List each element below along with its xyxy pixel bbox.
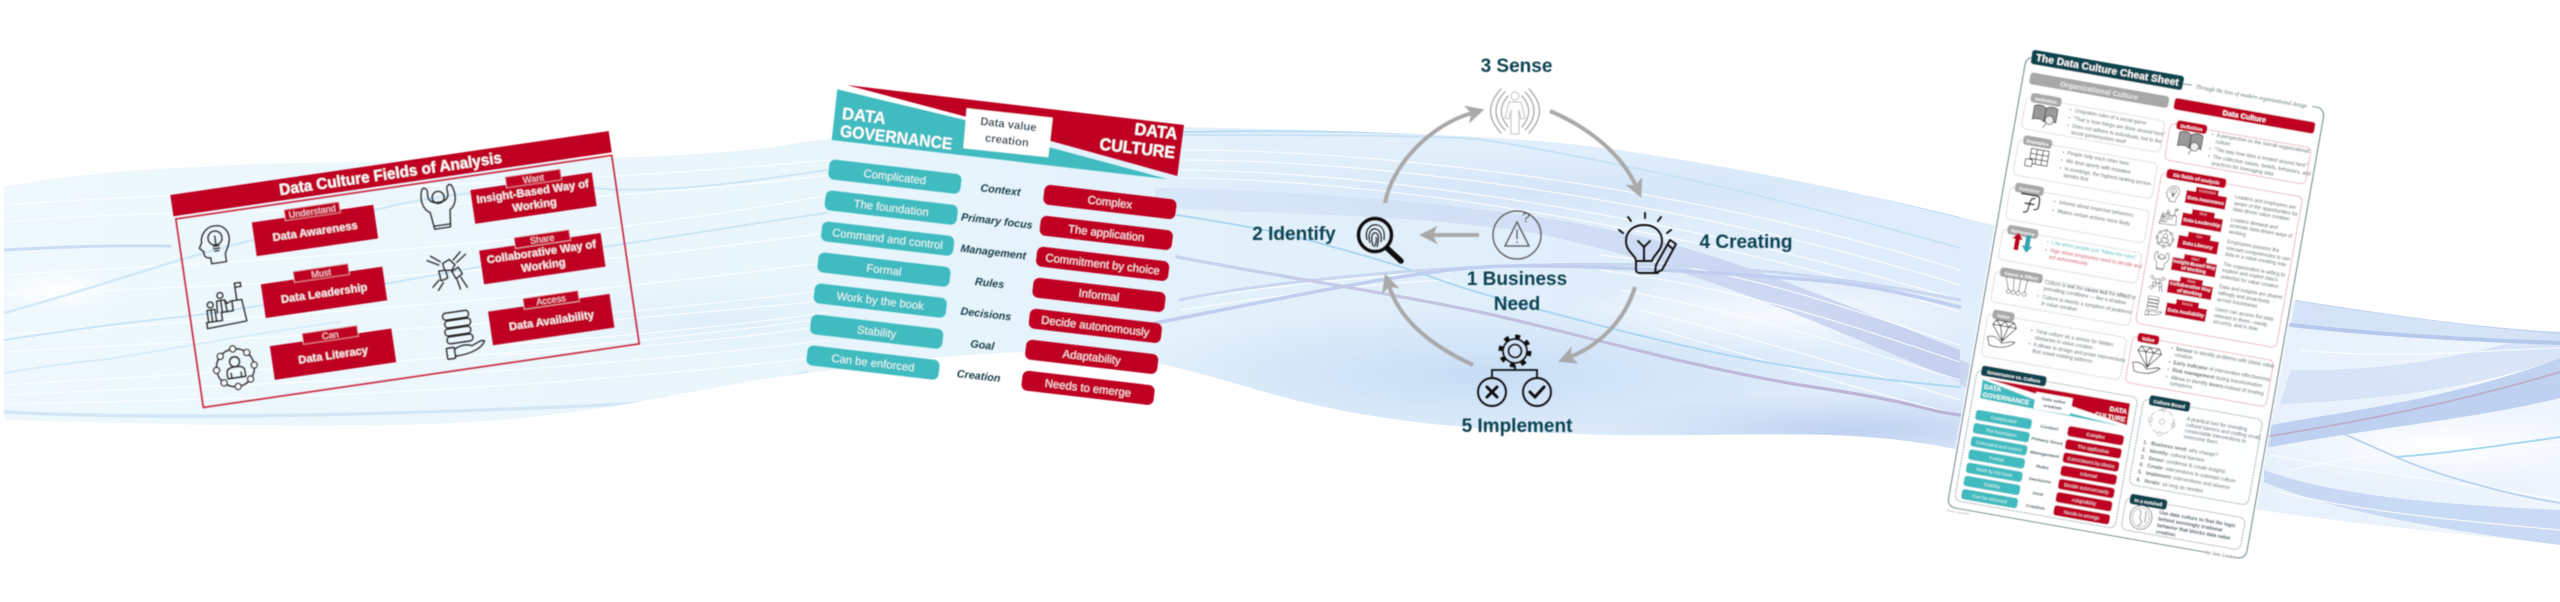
field row: data literacy: data in a value-creating way <box>2224 252 2287 269</box>
box: culture board: Implement: <box>2145 471 2173 481</box>
box: culture board: 5. <box>2137 470 2143 476</box>
field row: data awareness: Data Awareness <box>2187 195 2225 207</box>
version note: Version: July 2024 <box>1946 508 1970 516</box>
field: data availability: Access <box>536 293 567 307</box>
box: culture board: connectable interventions to <box>2184 428 2247 445</box>
field row: data awareness: Understand <box>2198 188 2216 195</box>
row: creation: Needs to emerge <box>1044 378 1132 400</box>
box: culture board: 3. <box>2140 455 2146 461</box>
header banner: GOVERNANCE <box>839 122 953 154</box>
box: culture board: interventions and observe <box>2173 476 2230 492</box>
box: org examples: People help each other here <box>2067 151 2130 168</box>
icon: fingerprint magnifier <box>1358 218 1401 261</box>
box: org function: Informs about expected behaviors <box>2059 200 2134 219</box>
row: decisions: Decide autonomously <box>1041 315 1150 339</box>
box: culture board: Iterate: <box>2144 478 2162 487</box>
box: culture value: Value <box>2141 336 2155 344</box>
row: primary focus: The foundation <box>853 198 929 219</box>
box: org examples: • <box>2060 158 2063 164</box>
box: culture definition: A perspective on the overall organizational <box>2216 133 2310 155</box>
field: collaborative way of working: Collaborative Way of <box>486 239 597 267</box>
heading: 2 identify: 2 Identify <box>1252 224 1336 245</box>
comparison rows <box>806 159 1177 406</box>
mini row: primary focus: The foundation <box>1985 428 2017 438</box>
icon: raised arms <box>420 184 459 230</box>
header banner: DATA <box>841 104 887 128</box>
box: org function: • <box>2053 199 2056 205</box>
box: org definition: • <box>2067 123 2070 129</box>
row: creation: Creation <box>956 368 1001 385</box>
field row: collaborative way of working: Collaborative Way <box>2169 281 2212 294</box>
box: culture definition: practices for leveraging data <box>2211 161 2274 178</box>
icon: warning in circle <box>1493 209 1541 259</box>
mini header banner: creation <box>2043 403 2062 412</box>
field row: data literacy: Can <box>2196 234 2203 239</box>
box: culture definition: • <box>2209 146 2212 153</box>
field: collaborative way of working: Share <box>529 233 555 246</box>
coloured ribbons <box>4 131 2560 503</box>
row: management: Commitment by choice <box>1045 252 1160 278</box>
box: org examples: • <box>2059 166 2062 172</box>
icon: data stack on hand <box>441 308 486 359</box>
box: culture value: • <box>2168 359 2171 366</box>
mini row: decisions: Work by the book <box>1976 467 2013 478</box>
icon: person in network ring <box>210 343 260 393</box>
field row: data availability: relevant to them—easily, <box>2214 313 2268 328</box>
box: org definition: Definition <box>2035 96 2057 106</box>
panel: data culture fields of analysis <box>170 131 640 408</box>
heading: 1 business need: Need <box>1494 294 1540 315</box>
mini row: goal: Stability <box>1983 482 2001 490</box>
box: org relevance: act autonomously <box>2048 255 2089 267</box>
field: insight-based way of working: Working <box>512 196 558 215</box>
box: culture value: of intervention effectiveness <box>2208 367 2270 383</box>
row: rules: Informal <box>1078 288 1120 304</box>
arrow: creating to implement <box>1570 287 1635 357</box>
field row: collaborative way of working <box>2147 271 2283 314</box>
box: org function <box>2005 181 2150 243</box>
mini row: decisions: Decisions <box>2028 476 2052 486</box>
row: goal: Adaptability <box>1062 349 1122 367</box>
field row: collaborative way of working: across boundaries <box>2216 297 2258 310</box>
mini row: rules: Rules <box>2035 464 2050 472</box>
outline frame <box>176 155 639 407</box>
box: culture board: Business need: <box>2151 441 2188 453</box>
box: culture board: Sense: <box>2148 456 2165 465</box>
box: culture board: cultural barriers <box>2170 452 2205 464</box>
mini row: management: Management <box>2030 449 2060 460</box>
icon: gear with decision tree <box>1478 336 1551 406</box>
box: org examples: Examples <box>2026 138 2049 148</box>
box: culture board: Create: <box>2147 463 2165 472</box>
field row: data leadership <box>2159 204 2294 247</box>
field row: data leadership: Must <box>2199 212 2207 217</box>
row: decisions: Decisions <box>960 306 1012 323</box>
box: culture board: 6. <box>2136 477 2142 484</box>
field row: insight-based way of working: Want <box>2191 257 2199 262</box>
box: culture board: Identify: <box>2149 448 2170 458</box>
box: org value: Value <box>1997 313 2010 321</box>
row: context: Complicated <box>863 168 927 187</box>
box: culture board: condense & create insights <box>2165 459 2226 475</box>
box: culture value: during transformation <box>2215 375 2263 389</box>
row: goal: Goal <box>970 338 996 353</box>
field row: data availability: Data Availability <box>2167 307 2205 319</box>
box: in a nutshell: Use data culture to find the logic <box>2159 510 2236 529</box>
subtitle signature: Through the lens of modern organizational design <box>2195 83 2308 110</box>
box: org function: Function <box>2019 186 2040 195</box>
field row: data literacy: Data Literacy <box>2182 240 2213 251</box>
field: data leadership: Data Leadership <box>280 282 368 306</box>
box: org definition: • <box>2068 115 2071 122</box>
box: in a nutshell <box>2121 493 2246 550</box>
mini header banner: DATA <box>2109 406 2128 416</box>
box: governance vs culture: Governance vs. Culture <box>1987 369 2041 385</box>
icon: mini cycle <box>2146 405 2178 438</box>
field row: collaborative way of working: willingly and proactively <box>2218 290 2270 306</box>
mini header banner: DATA <box>1983 384 2002 394</box>
heading: 5 implement: 5 Implement <box>1462 416 1573 437</box>
box: culture value: levers instead of treating <box>2208 382 2264 397</box>
field row: data leadership: Leaders demand and <box>2230 217 2278 231</box>
data culture heading <box>2173 98 2316 134</box>
box: org examples: In meetings, the highest-ranking person <box>2064 166 2152 188</box>
box: culture value: Early indicator <box>2173 360 2208 372</box>
panel: culture cycle <box>1252 56 1792 437</box>
row: primary focus: The application <box>1067 224 1145 244</box>
wave background <box>0 100 2560 560</box>
box: culture value: • <box>2170 346 2173 352</box>
box: culture board: cultural barriers and crafting small, <box>2185 422 2261 442</box>
row: management: Command and control <box>832 227 943 252</box>
row: decisions: Work by the book <box>836 291 925 313</box>
box: culture definition: • <box>2211 132 2214 138</box>
field row: data awareness <box>2165 182 2300 224</box>
box: culture board: overcome them <box>2183 434 2218 446</box>
field: data literacy: Can <box>321 329 339 341</box>
row: goal: Stability <box>856 324 897 341</box>
row: creation <box>806 345 1155 406</box>
field row: insight-based way of working <box>2152 249 2286 291</box>
field: data availability: Data Availability <box>508 309 595 333</box>
heading: 1 business need: 1 Business <box>1467 269 1567 290</box>
mini row: rules: Formal <box>1989 455 2004 463</box>
box: org definition: "That is how things are done around here" <box>2073 116 2166 138</box>
field row: insight-based way of working: Insight-Based Way <box>2173 258 2216 272</box>
icon: climbers with flag <box>202 282 247 329</box>
mini header banner: Data value <box>2041 396 2066 406</box>
mini row: rules <box>1968 449 2118 485</box>
field row: insight-based way of working: of Working <box>2181 265 2206 276</box>
box: governance vs culture <box>1954 364 2139 529</box>
title: The Data Culture Cheat Sheet <box>2035 53 2180 89</box>
field row: collaborative way of working: Data and insights are shared <box>2219 284 2283 301</box>
box: culture board: A practical tool for revealing <box>2186 416 2248 433</box>
box: culture definition: "The way how data is treated around here" <box>2214 147 2308 169</box>
row: rules: Formal <box>866 263 902 279</box>
box: org cause and effect: in value creation <box>2041 301 2078 313</box>
mini header banner: CULTURE <box>2094 411 2126 424</box>
field: insight-based way of working: Insight-Based Way of <box>476 178 590 206</box>
row: context <box>828 159 1177 220</box>
box: org relevance: • <box>2045 247 2048 254</box>
box: culture board <box>2129 394 2265 506</box>
mini row: management <box>1970 436 2120 472</box>
box: org value: • <box>2028 341 2031 348</box>
box: culture board: 4. <box>2139 462 2144 469</box>
box: culture value: Sensor <box>2175 347 2193 355</box>
field: data awareness <box>251 197 378 256</box>
icon: lightbulb and pen <box>1619 213 1676 273</box>
mini header banner: GOVERNANCE <box>1982 392 2030 407</box>
icon: warning in circle: ? <box>1522 209 1530 225</box>
row: management: Management <box>960 243 1027 262</box>
box: in a nutshell: behind seemingly irrational <box>2158 516 2223 534</box>
field row: collaborative way of working: of Working <box>2177 288 2202 298</box>
icon: head with bulb <box>196 224 233 265</box>
heading: 4 creating: 4 Creating <box>1700 232 1792 253</box>
icon: sensing person <box>1490 89 1540 134</box>
box: culture value <box>2125 331 2276 407</box>
field row: data availability <box>2145 294 2274 337</box>
field row: data awareness: aware of the opportunities for <box>2233 201 2298 218</box>
organizational culture heading <box>2029 72 2170 108</box>
mini row: goal: Adaptability <box>2072 497 2097 507</box>
box: org relevance: Relevance <box>2011 228 2035 238</box>
box: org relevance <box>1998 224 2145 284</box>
box: org function: Makes certain actions more likely <box>2057 209 2131 228</box>
header bar: Data Culture Fields of Analysis <box>278 150 503 199</box>
box: org relevance: • <box>2046 239 2049 246</box>
box: org definition: Does not adhere to individuals, but to the <box>2071 124 2162 145</box>
panel: data governance vs data culture <box>806 85 1184 406</box>
field row: data literacy: Employees possess the <box>2227 239 2280 254</box>
box: culture definition: culture <box>2215 139 2231 148</box>
box: culture board: interventions to outsmart culture <box>2165 467 2236 485</box>
mini row: decisions: Decide autonomously <box>2064 482 2110 495</box>
field row: data awareness: Leaders and employees are <box>2234 194 2297 211</box>
box: in a nutshell: In a nutshell <box>2134 497 2163 508</box>
data culture heading: Data Culture <box>2222 108 2267 124</box>
box: culture board: as long as needed <box>2162 482 2203 495</box>
box: org definition <box>2021 92 2169 153</box>
box: org cause and effect: Culture is <box>2044 280 2068 290</box>
arrow: identify to sense <box>1385 113 1472 203</box>
wave body <box>0 100 2560 560</box>
white streaks <box>4 150 2560 530</box>
mini row: creation <box>1961 489 2111 525</box>
header bar <box>170 131 612 216</box>
header banner <box>832 85 1184 179</box>
mini header banner <box>1979 377 2131 427</box>
header banner: Data value <box>980 116 1037 134</box>
box: org value <box>1981 308 2131 381</box>
box: org relevance: Low when people just "follow the rules" <box>2051 240 2137 261</box>
box: org examples: speaks first <box>2063 173 2089 183</box>
box: culture definition: The collective values, beliefs, behaviors, and <box>2212 155 2311 178</box>
box: org cause and effect: Culture is merely a symptom of problems <box>2042 295 2133 316</box>
mini row: primary focus: Primary focus <box>2031 436 2064 447</box>
field row: collaborative way of working: Share <box>2187 279 2196 285</box>
mini row: creation: Needs to emerge <box>2064 509 2100 521</box>
organizational culture heading: Organizational Culture <box>2059 79 2139 102</box>
box: org cause and effect: not the cause but the effect of <box>2067 284 2136 302</box>
icon: walnut <box>2128 504 2154 531</box>
box: culture value: Risk management <box>2172 368 2215 381</box>
box: org cause and effect: prevailing conditions — like a shadow <box>2043 286 2127 307</box>
box: culture definition: • <box>2207 154 2210 160</box>
sheet frame <box>1945 54 2327 561</box>
mini row: creation: Creation <box>2025 503 2045 512</box>
box: org value: that outwit existing patterns <box>2032 349 2093 365</box>
arrow: implement to identify <box>1389 286 1473 365</box>
row: decisions <box>813 283 1163 344</box>
box: org cause and effect: Cause & Effect <box>2004 271 2039 282</box>
author signature: by Jens Linden <box>2205 551 2236 561</box>
box: culture value: creation <box>2174 352 2193 361</box>
row: rules: Rules <box>974 276 1005 291</box>
mini row: primary focus <box>1972 423 2122 459</box>
heading: 3 sense: 3 Sense <box>1481 56 1552 77</box>
header banner: creation <box>984 132 1029 150</box>
mini row: context: Context <box>2040 424 2059 433</box>
box: org cause and effect <box>1990 266 2137 326</box>
mini row: primary focus: The application <box>2077 444 2110 454</box>
box: in a nutshell: behavior that blocks data value <box>2156 523 2231 542</box>
box: org examples: We deal openly with mistakes <box>2065 159 2132 176</box>
header banner: DATA <box>1134 120 1178 143</box>
box: culture value: • <box>2167 367 2170 373</box>
field row: data literacy <box>2154 226 2292 270</box>
box: org relevance: High when employees need to decide and <box>2050 248 2142 270</box>
field: data literacy: Data Literacy <box>298 345 370 367</box>
field: data leadership: Must <box>311 267 332 280</box>
box: in a nutshell: creation. <box>2155 529 2177 539</box>
box: six fields of analysis <box>2135 167 2304 348</box>
field row: data availability: Users can access the data <box>2215 307 2274 323</box>
box: org definition: social game/system itself <box>2070 130 2127 146</box>
box: culture value: • <box>2165 374 2168 380</box>
row: context: Complex <box>1087 194 1133 212</box>
field row: data availability: Access <box>2182 301 2193 307</box>
header banner: CULTURE <box>1099 135 1176 162</box>
mini row: context: Complex <box>2086 432 2106 440</box>
box: org cause and effect: • <box>2039 279 2042 285</box>
box: org cause and effect: • <box>2036 294 2039 300</box>
box: org value: It allows to design and probe interventions <box>2033 342 2126 364</box>
box: org definition: • <box>2069 107 2072 114</box>
arrow: sense to creating <box>1550 111 1636 186</box>
field row: data leadership: Data Leadership <box>2183 217 2221 229</box>
mini row: goal: Goal <box>2032 490 2044 498</box>
box: culture value: Allows to identify <box>2170 375 2209 388</box>
row: rules <box>817 252 1166 313</box>
box: culture value: symptoms <box>2169 381 2193 391</box>
icon: puzzle hands <box>426 251 470 293</box>
mini row: context: Complicated <box>1990 415 2017 424</box>
box: culture board: Culture Board <box>2153 399 2186 410</box>
mini row: context <box>1975 409 2125 446</box>
box: culture value: to identify problems with (data) value <box>2193 350 2275 370</box>
field row: data literacy: relevant competencies to use <box>2225 246 2291 263</box>
box: culture definition: Definition <box>2180 123 2203 133</box>
box: org value: obstacles in value creation <box>2034 335 2093 352</box>
field row: insight-based way of working: explore and exploit data's <box>2221 268 2279 284</box>
mini row: management: Command and control <box>1976 440 2022 452</box>
mini row: rules: Informal <box>2080 472 2097 479</box>
field: insight-based way of working: Want <box>522 172 545 185</box>
heading: 1 business need <box>1467 269 1567 315</box>
box: culture board: 1. <box>2143 440 2148 446</box>
box: org examples: • <box>2062 150 2065 156</box>
field: data awareness: Data Awareness <box>272 220 358 244</box>
box: six fields of analysis: Six fields of analysis <box>2172 173 2220 187</box>
field: collaborative way of working: Working <box>521 257 567 275</box>
box: org examples <box>2013 134 2159 199</box>
row: context: Context <box>980 182 1022 199</box>
field: collaborative way of working <box>478 225 605 284</box>
row: goal <box>809 314 1159 375</box>
row: primary focus: Primary focus <box>960 211 1033 232</box>
box: org value: • <box>2030 328 2033 334</box>
row: management <box>820 221 1170 282</box>
mini row: decisions <box>1965 462 2115 499</box>
field row: data availability: securely, and in time <box>2212 319 2259 333</box>
field: data literacy <box>269 321 396 380</box>
panel: data culture cheat sheet <box>1944 48 2328 565</box>
field row: data leadership: promote data-driven ways of <box>2229 223 2293 240</box>
box: culture board: why change? <box>2188 448 2218 459</box>
mini row: management: Commitment by choice <box>2067 456 2115 469</box>
box: org value: Treat culture as a sensor for hidden <box>2035 329 2114 349</box>
arrow: business need to identify <box>1432 233 1479 237</box>
field row: data leadership: working <box>2228 229 2247 238</box>
mini row: goal <box>1963 475 2113 512</box>
field row: insight-based way of working: potential for value creation <box>2220 274 2279 290</box>
field: data leadership <box>260 259 387 318</box>
field: data availability <box>487 286 614 345</box>
box: culture definition <box>2164 119 2316 185</box>
mini row: creation: Can be enforced <box>1972 493 2007 504</box>
box: org definition: Unspoken rules of a social game <box>2074 108 2147 127</box>
field row: insight-based way of working: The organization is willing to <box>2223 262 2286 279</box>
row: creation: Can be enforced <box>831 353 915 374</box>
field row: data awareness: data-driven value creation <box>2232 207 2290 223</box>
field: insight-based way of working <box>469 165 597 224</box>
box: org function: • <box>2052 208 2055 214</box>
box: culture board: 2. <box>2141 447 2147 454</box>
field: data awareness: Understand <box>288 203 336 220</box>
row: primary focus <box>824 190 1173 251</box>
